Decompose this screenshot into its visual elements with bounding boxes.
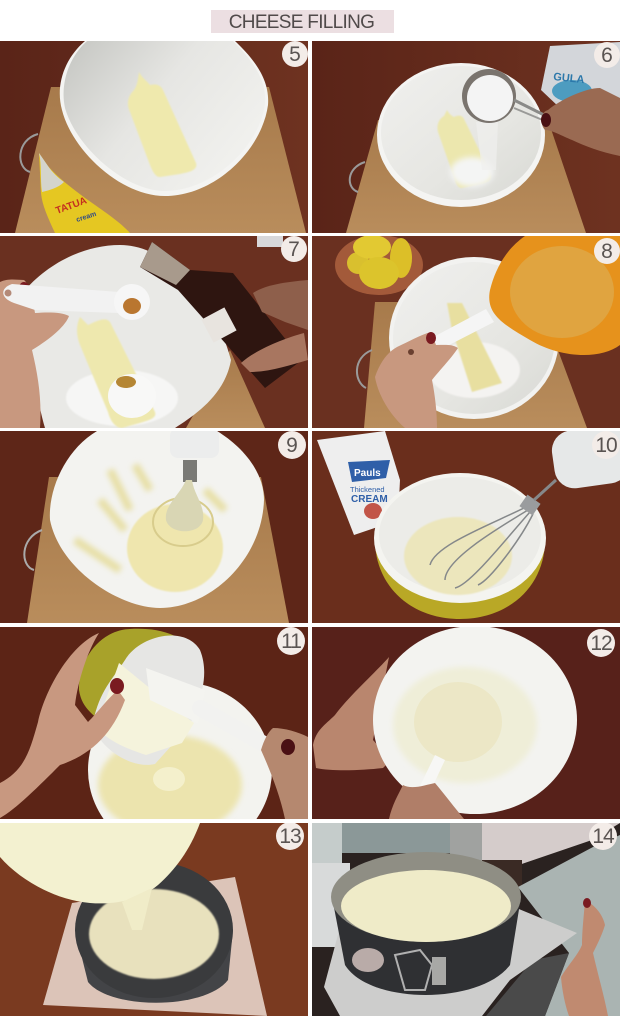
- step number 13: [276, 822, 304, 850]
- vanilla bottle: [140, 242, 302, 388]
- spatula: [146, 668, 278, 752]
- white object: [257, 236, 283, 247]
- dark gap: [482, 860, 522, 890]
- lower white bowl: [88, 682, 272, 858]
- sugar pile: [428, 342, 520, 398]
- cream mass: [99, 663, 194, 755]
- cutting board: [364, 302, 587, 428]
- lower hand: [389, 783, 464, 819]
- panel: step 14 pan in the oven: [312, 822, 620, 1016]
- step number 14: 14: [592, 825, 615, 848]
- whipped cream: [404, 517, 512, 595]
- white bowl rim: [374, 473, 546, 603]
- step number 13: 13: [279, 825, 301, 848]
- icing sugar bag: [541, 42, 620, 108]
- back wall: [342, 823, 450, 853]
- falling sugar: [479, 131, 498, 169]
- step number 7: 7: [288, 238, 300, 261]
- panel: step 11 folding cream into cheese: [0, 627, 308, 858]
- board handle: [350, 162, 365, 192]
- left white counter: [312, 863, 350, 947]
- cream cheese block: [437, 110, 491, 188]
- springform pan: [331, 852, 521, 995]
- springform pan: [75, 862, 233, 1003]
- cream cheese packet: TATUA: [54, 195, 88, 217]
- cutting board: [27, 477, 289, 623]
- bowl interior: [64, 41, 265, 191]
- cream cheese batter: [127, 504, 223, 592]
- hand mixer: [549, 423, 620, 491]
- panel: step 13 pouring into the pan: [0, 822, 308, 1016]
- white bowl: [373, 626, 577, 814]
- fridge panel: [518, 835, 620, 1016]
- board handle: [20, 134, 38, 172]
- cutting board: [186, 350, 265, 428]
- panel: step 7 adding vanilla: [0, 236, 308, 428]
- thickened cream carton: CREAM: [351, 494, 388, 505]
- left hand: [0, 633, 125, 818]
- thickened cream carton: [317, 431, 400, 535]
- left hand: [0, 280, 69, 428]
- sugar on block: [108, 374, 156, 418]
- swirl: [153, 498, 213, 546]
- yellow bowl: [375, 540, 545, 619]
- whisk: [430, 480, 556, 588]
- step number 5: [282, 41, 308, 67]
- cream cheese block: [447, 303, 502, 392]
- step number 9: 9: [286, 434, 298, 457]
- title: CHEESE FILLING: [229, 12, 374, 33]
- hand: [375, 332, 458, 428]
- white bowl: [25, 245, 231, 428]
- step number 11: 11: [281, 630, 301, 653]
- cheese lump: [153, 767, 185, 791]
- step number 10: 10: [595, 434, 617, 457]
- board handle: [357, 350, 372, 388]
- panel: step 5 cream cheese in bowl: [0, 41, 308, 233]
- hand: [541, 88, 620, 156]
- panel: step 6 adding icing sugar: [312, 41, 620, 233]
- batter stream: [122, 888, 152, 930]
- measuring spoon: [3, 284, 150, 320]
- cream cheese block: [128, 72, 196, 177]
- cream cheese packet: cream: [75, 211, 97, 224]
- light wall corner: [312, 823, 342, 863]
- white bowl: [377, 63, 545, 207]
- butter streaks: [75, 465, 225, 570]
- step number 8: 8: [601, 240, 613, 263]
- sugar pile: [450, 157, 494, 187]
- batter: [414, 682, 502, 762]
- panel: step 12 mixed batter: [312, 626, 620, 819]
- cream cheese packet: [39, 153, 130, 233]
- icing sugar bag: GULA: [553, 71, 585, 86]
- step number 7: [281, 236, 307, 262]
- batter halo: [393, 667, 537, 783]
- step number 12: [587, 629, 615, 657]
- cutting board: [15, 87, 306, 233]
- orange jug: [489, 236, 620, 355]
- thickened cream carton: Pauls: [354, 468, 381, 479]
- step number 6: 6: [601, 44, 613, 67]
- white bowl: [60, 41, 268, 196]
- step number 12: 12: [590, 632, 612, 655]
- measuring spoon: [406, 309, 494, 363]
- vanilla drip: [116, 376, 136, 388]
- step number 11: [277, 627, 305, 655]
- parchment: [324, 907, 577, 1016]
- bowl of lemons: [335, 235, 423, 295]
- right hand: [241, 280, 308, 372]
- cream cheese block: [77, 317, 155, 428]
- upper fitting: [482, 823, 620, 868]
- panel: step 10 whisking cream: [312, 423, 620, 623]
- panel: step 8 adding lemon juice: [312, 235, 620, 428]
- cutting board: [346, 120, 586, 233]
- cheese batter: [98, 735, 242, 835]
- yellow bowl interior: [93, 636, 204, 765]
- step number 10: [592, 431, 620, 459]
- sugar pile: [66, 370, 178, 426]
- step number 8: [594, 238, 620, 264]
- step number 14: [589, 822, 617, 850]
- bowl interior: [379, 477, 541, 593]
- spatula: [418, 755, 445, 792]
- yellow bowl outer: [79, 629, 190, 730]
- measuring cup: [462, 69, 546, 123]
- bowl interior: [381, 66, 541, 200]
- bowl interior: [393, 262, 555, 414]
- step number 6: [594, 42, 620, 68]
- left hand: [313, 657, 391, 770]
- poured batter: [89, 889, 219, 979]
- board handle: [24, 530, 42, 570]
- panel: step 9 beating the mixture: [0, 428, 308, 623]
- baking parchment: [43, 877, 267, 1016]
- step number 5: 5: [289, 43, 301, 66]
- white bowl: [389, 257, 559, 419]
- step number 9: [278, 431, 306, 459]
- thickened cream carton: Thickened: [350, 485, 385, 494]
- hand mixer: [166, 428, 219, 531]
- right hand: [261, 728, 308, 819]
- white bowl: [50, 431, 264, 608]
- door edge: [486, 895, 581, 1016]
- pouring bowl: [0, 823, 200, 903]
- hand: [561, 898, 608, 1016]
- oven door hinge: [450, 823, 482, 865]
